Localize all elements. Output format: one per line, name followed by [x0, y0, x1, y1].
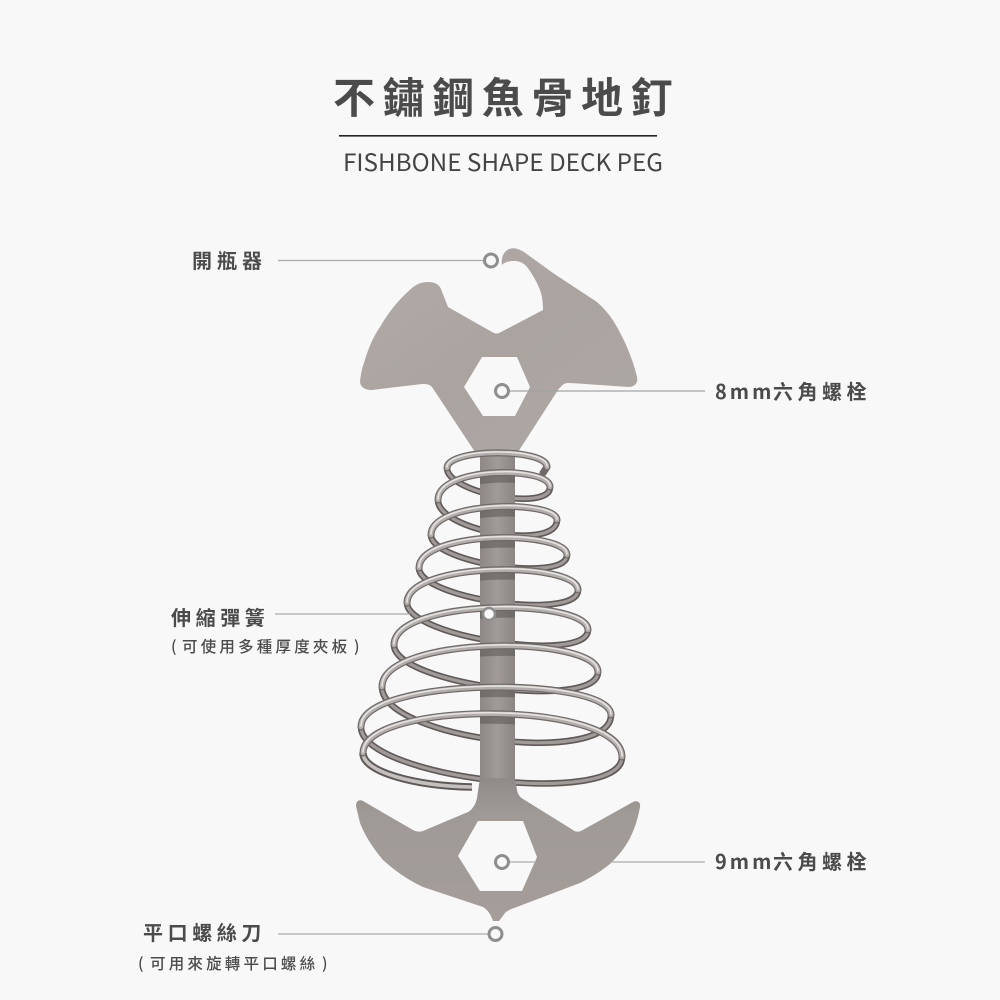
callout: telescopic spring	[171, 602, 495, 657]
callout: flat screwdriver: (	[138, 952, 147, 974]
spring front arcs	[361, 452, 622, 757]
callout: flat screwdriver	[138, 917, 502, 974]
callout: 8mm hex bolt	[496, 376, 871, 405]
callout: telescopic spring: (	[171, 635, 180, 657]
callout: 9mm hex bolt: 六角螺栓	[773, 846, 871, 875]
callout: bottle opener: 開瓶器	[192, 245, 267, 274]
bottom fluke with 9mm hex hole and flat screwdriver tip	[356, 778, 640, 921]
callout: 9mm hex bolt	[496, 846, 871, 875]
callout: telescopic spring: )	[354, 635, 363, 657]
callout: 8mm hex bolt: 8mm	[715, 376, 774, 405]
center bar	[480, 445, 515, 790]
callout: flat screwdriver: 可用來旋轉平口螺絲	[150, 952, 318, 974]
callout: flat screwdriver: )	[322, 952, 331, 974]
subtitle: FISHBONE SHAPE DECK PEG	[343, 143, 663, 178]
spring back arcs	[361, 468, 622, 787]
coil shadows on bar	[480, 476, 515, 724]
title: 不鏽鋼魚骨地釘	[333, 65, 680, 126]
callout: bottle opener	[192, 245, 498, 274]
fishbone deck peg illustration	[356, 248, 640, 921]
callout: 8mm hex bolt: 六角螺栓	[773, 376, 871, 405]
callout: telescopic spring: 伸縮彈簧	[171, 602, 269, 631]
top head with bottle opener and 8mm hex hole	[360, 248, 637, 452]
callout: flat screwdriver: 平口螺絲刀	[143, 917, 266, 946]
callout: 9mm hex bolt: 9mm	[715, 846, 774, 875]
callout: telescopic spring: 可使用多種厚度夾板	[182, 635, 350, 657]
